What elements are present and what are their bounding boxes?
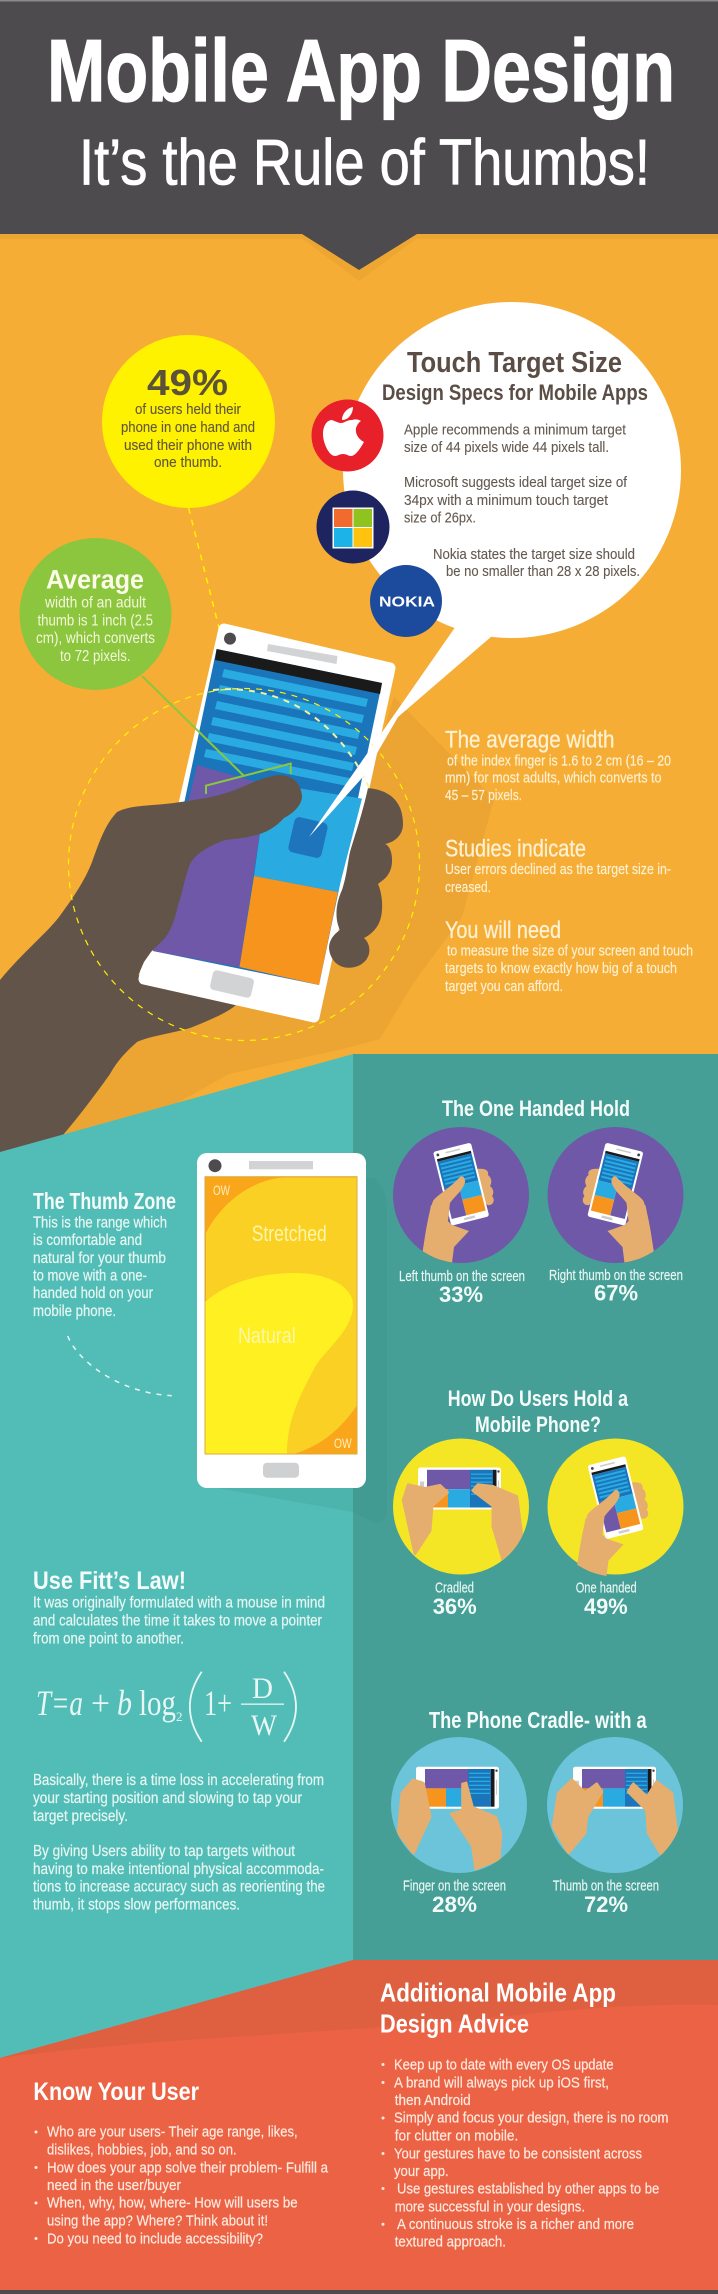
callout: 49 percent	[102, 335, 275, 508]
text: you will need: You will need	[445, 917, 561, 944]
thumb zone phone shadow	[217, 1178, 387, 1523]
subheading: Design Specs for Mobile Apps	[382, 380, 648, 405]
text: studies indicate: User errors declined as the target size in-	[445, 861, 671, 878]
text: know your user	[33, 2078, 329, 2247]
text: additional advice: textured approach.	[395, 2234, 506, 2251]
text: know your user: Know Your User	[33, 2078, 199, 2106]
microsoft text: size of 26px.	[404, 510, 476, 526]
apple text: Apple recommends a minimum target	[404, 422, 627, 438]
thumb zone phone: OW	[213, 1182, 231, 1198]
icon: microsoft	[316, 490, 390, 564]
text: know your user: using the app? Where? Think about it!	[47, 2213, 268, 2230]
text: additional advice	[380, 1978, 668, 2251]
zone: natural	[206, 1273, 353, 1454]
text: basically: your starting position and slowing to tap your	[33, 1790, 302, 1807]
zone: stretched	[206, 1178, 356, 1454]
formula	[36, 1672, 296, 1742]
text: the thumb zone	[33, 1188, 176, 1320]
orange background	[0, 0, 718, 1060]
formula: 2	[176, 1709, 182, 1724]
text: know your user: How does your app solve their problem- Fulfill a	[47, 2159, 329, 2176]
icon: apple	[312, 400, 384, 472]
section: phone cradle: Finger on the screen	[403, 1879, 506, 1895]
nokia text	[433, 546, 640, 580]
section: phone cradle	[391, 1707, 683, 1917]
header banner	[0, 0, 718, 281]
text: basically	[33, 1772, 324, 1825]
icon: left thumb	[393, 1127, 529, 1263]
callout: touch target size	[309, 302, 681, 837]
text: basically: target precisely.	[33, 1808, 128, 1825]
text: use fitts law	[33, 1567, 325, 1647]
text: you will need: target you can afford.	[445, 978, 563, 995]
text: the thumb zone: natural for your thumb	[33, 1250, 166, 1267]
apple text	[404, 422, 627, 456]
section: one handed hold: 33%	[439, 1282, 483, 1307]
callout: average thumb: to 72 pixels.	[60, 648, 130, 665]
icon: right thumb	[548, 1127, 684, 1263]
thumb reach dashed circle	[68, 688, 420, 1040]
hand shadow on orange	[63, 697, 494, 1135]
text: additional advice: A brand will always pick up iOS first,	[394, 2074, 609, 2091]
formula: log	[139, 1683, 176, 1723]
section: phone cradle: 28%	[432, 1892, 477, 1917]
section: phone cradle: 72%	[584, 1892, 628, 1917]
icon: one handed	[548, 1438, 684, 1576]
text: know your user: dislikes, hobbies, job, and so on.	[47, 2141, 237, 2158]
section: phone cradle: The Phone Cradle- with a	[429, 1707, 647, 1733]
text: the thumb zone: mobile phone.	[33, 1303, 116, 1320]
section: phone cradle: Thumb on the screen	[553, 1879, 659, 1895]
text: additional advice: A continuous stroke is a richer and more	[397, 2216, 634, 2233]
section: one handed hold: 67%	[594, 1281, 638, 1306]
hand fingers	[329, 788, 403, 968]
text: know your user: need in the user/buyer	[47, 2177, 181, 2194]
icon: cradled	[393, 1438, 529, 1574]
text: basically: Basically, there is a time loss in accelerating from	[33, 1772, 324, 1789]
microsoft text	[404, 474, 628, 526]
text: additional advice: for clutter on mobile.	[395, 2127, 518, 2144]
section: how do users hold: How Do Users Hold a	[448, 1386, 629, 1411]
text: average width: mm) for most adults, which converts to	[445, 770, 662, 786]
callout: average thumb: thumb is 1 inch (2.5	[38, 613, 153, 630]
panel: light teal	[0, 1054, 353, 2060]
formula: b	[117, 1683, 132, 1723]
formula: 1+	[204, 1683, 232, 1723]
icon: nokia	[370, 565, 442, 637]
text: additional advice: your app.	[394, 2163, 449, 2180]
section: one handed hold: Right thumb on the screen	[549, 1268, 683, 1284]
text: you will need: targets to know exactly how big of a touch	[445, 960, 677, 977]
hand behind phone	[0, 975, 240, 1152]
text: average width: of the index finger is 1.6 to 2 cm (16 – 20	[447, 752, 671, 769]
callout: 49 percent: 49%	[147, 362, 228, 403]
text: additional advice: more successful in your designs.	[395, 2199, 585, 2216]
section: one handed hold: Left thumb on the screen	[399, 1269, 525, 1285]
text: additional advice: Your gestures have to be consistent across	[394, 2145, 642, 2162]
section: one handed hold: The One Handed Hold	[442, 1096, 630, 1121]
text: use fitts law: Use Fitt’s Law!	[33, 1567, 186, 1595]
callout: average thumb: Average	[46, 564, 144, 594]
thumb zone phone	[197, 1153, 366, 1488]
section: how do users hold	[393, 1386, 684, 1619]
text: use fitts law: It was originally formulated with a mouse in mind	[33, 1595, 325, 1612]
formula: +	[91, 1683, 110, 1723]
text: the thumb zone: The Thumb Zone	[33, 1188, 176, 1214]
text: the thumb zone: This is the range which	[33, 1214, 167, 1232]
section: how do users hold: One handed	[576, 1581, 637, 1597]
callout: 49 percent: phone in one hand and	[121, 419, 255, 436]
thumb width measure line	[142, 676, 291, 794]
section: how do users hold: Mobile Phone?	[475, 1412, 601, 1437]
text: by giving users: tions to increase accuracy such as reorienting the	[33, 1879, 325, 1896]
text: the thumb zone: handed hold on your	[33, 1285, 153, 1302]
text: average width	[445, 726, 671, 804]
nokia text: be no smaller than 28 x 28 pixels.	[446, 563, 640, 580]
text: additional advice: Use gestures established by other apps to be	[397, 2180, 659, 2197]
thumb zone phone: OW	[334, 1435, 352, 1451]
formula: W	[251, 1709, 278, 1742]
text: the thumb zone: is comfortable and	[33, 1232, 142, 1249]
text: studies indicate	[445, 835, 671, 896]
callout: average thumb: cm), which converts	[36, 630, 155, 647]
text: the thumb zone: to move with a one-	[33, 1268, 147, 1285]
microsoft text: 34px with a minimum touch target	[404, 492, 609, 509]
text: use fitts law: from one point to another.	[33, 1630, 184, 1647]
text: additional advice: Keep up to date with every OS update	[394, 2056, 614, 2073]
text: average width: The average width	[445, 726, 614, 754]
callout: average thumb: width of an adult	[44, 594, 147, 612]
panel: dark teal	[353, 1054, 718, 1964]
section: how do users hold: 36%	[433, 1594, 477, 1619]
apple text: size of 44 pixels wide 44 pixels tall.	[404, 439, 609, 456]
thumb zone phone: Natural	[238, 1323, 296, 1348]
formula: D	[252, 1672, 273, 1705]
text: use fitts law: and calculates the time it takes to move a pointer	[33, 1613, 322, 1630]
connector: yellow dashed line	[189, 508, 234, 685]
text: studies indicate: Studies indicate	[445, 835, 586, 862]
text: know your user: When, why, how, where- How will users be	[47, 2195, 298, 2212]
callout: average thumb	[20, 538, 172, 690]
icon: finger on screen	[391, 1737, 527, 1873]
text: know your user: Do you need to include accessibility?	[47, 2230, 263, 2247]
section: how do users hold: Cradled	[435, 1581, 474, 1597]
formula: T=a	[36, 1683, 83, 1723]
text: additional advice: Design Advice	[380, 2009, 529, 2039]
section: how do users hold: 49%	[584, 1594, 628, 1619]
callout: 49 percent: used their phone with	[124, 437, 252, 454]
large phone	[144, 629, 390, 1017]
section: one handed hold	[393, 1096, 684, 1307]
callout: 49 percent: of users held their	[135, 401, 241, 418]
text: by giving users	[33, 1843, 325, 1913]
text: additional advice: Additional Mobile App	[380, 1978, 616, 2008]
text: by giving users: thumb, it stops slow performances.	[33, 1896, 240, 1913]
icon: thumb on screen	[547, 1737, 683, 1873]
text: additional advice: then Android	[395, 2092, 471, 2109]
text: by giving users: By giving Users ability to tap targets without	[33, 1843, 296, 1860]
text: additional advice: Simply and focus your design, there is no room	[394, 2110, 668, 2127]
text: studies indicate: creased.	[445, 879, 491, 896]
nokia text: Nokia states the target size should	[433, 546, 635, 563]
hand over phone: thumb and palm	[0, 775, 302, 1152]
icon: nokia: NOKIA	[379, 594, 435, 610]
text: average width: 45 – 57 pixels.	[445, 787, 522, 804]
panel: red footer	[0, 1960, 718, 2294]
dashed arc	[68, 1336, 172, 1396]
text: by giving users: having to make intentional physical accommoda-	[33, 1861, 324, 1878]
microsoft text: Microsoft suggests ideal target size of	[404, 474, 628, 491]
thumb zone phone: Stretched	[252, 1221, 327, 1246]
callout: 49 percent: one thumb.	[154, 454, 222, 471]
text: know your user: Who are your users- Their age range, likes,	[47, 2124, 298, 2141]
text: you will need	[445, 917, 693, 995]
heading: Touch Target Size	[407, 347, 622, 379]
